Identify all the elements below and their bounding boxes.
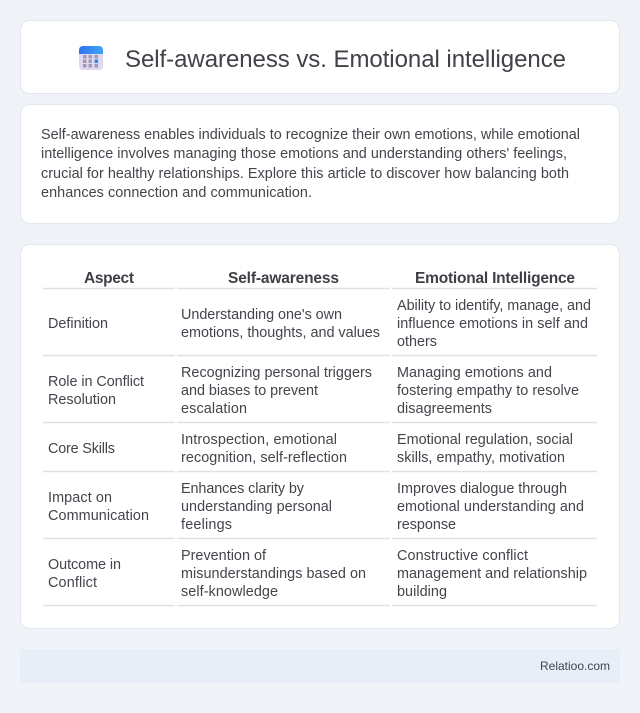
row: core skills: skills, empathy, motivation <box>397 450 565 466</box>
row: core skills: recognition, self-reflection <box>181 450 347 466</box>
row: core skills <box>43 432 597 472</box>
row: role in conflict resolution: fostering empathy to resolve <box>397 383 579 399</box>
row: core skills: Introspection, emotional <box>181 432 337 448</box>
row: outcome in conflict: building <box>397 584 447 600</box>
row: outcome in conflict: self-knowledge <box>181 584 278 600</box>
table header <box>43 270 597 288</box>
row: outcome in conflict: Conflict <box>48 575 97 591</box>
row: role in conflict resolution: Managing emotions and <box>397 365 552 381</box>
row: definition: Understanding one's own <box>181 307 342 323</box>
row: outcome in conflict <box>43 548 597 606</box>
row: core skills: Emotional regulation, social <box>397 432 573 448</box>
title: Self-awareness vs. Emotional intelligence <box>125 46 566 73</box>
panel: comparison table <box>20 244 620 628</box>
text block: introduction: crucial for healthy relationships. Explore this article to discover how balancing both <box>41 166 569 182</box>
row: impact on communication: response <box>397 517 456 533</box>
row: role in conflict resolution: Recognizing personal triggers <box>181 365 372 381</box>
text block: introduction: intelligence involves managing those emotions and understanding others' feelings, <box>41 146 567 162</box>
row: role in conflict resolution: and biases to prevent <box>181 383 318 399</box>
row: impact on communication: Communication <box>48 508 149 524</box>
row: outcome in conflict: management and relationship <box>397 566 587 582</box>
row: outcome in conflict: Constructive conflict <box>397 548 528 564</box>
row: outcome in conflict: Prevention of <box>181 548 267 564</box>
table header: Self-awareness <box>228 270 339 287</box>
row: definition: influence emotions in self and <box>397 316 588 332</box>
row: impact on communication: emotional understanding and <box>397 499 584 515</box>
row: outcome in conflict: Outcome in <box>48 557 121 573</box>
footer <box>20 649 620 683</box>
panel: introduction <box>20 104 620 224</box>
row: definition: Definition <box>48 316 108 332</box>
row: impact on communication: Improves dialogue through <box>397 481 567 497</box>
row: role in conflict resolution <box>43 365 597 422</box>
row: definition: Ability to identify, manage, and <box>397 298 591 314</box>
panel: header <box>20 20 620 94</box>
row: core skills: Core Skills <box>48 441 115 457</box>
text block: introduction: enhances connection and communication. <box>41 185 312 201</box>
row: impact on communication: understanding personal <box>181 499 332 515</box>
footer text: Relatioo.com <box>540 659 610 673</box>
row: impact on communication: Enhances clarity by <box>181 481 305 497</box>
table header: Aspect <box>84 270 134 287</box>
table header: Emotional Intelligence <box>415 270 575 287</box>
row: role in conflict resolution: escalation <box>181 401 247 417</box>
row: impact on communication: feelings <box>181 517 232 533</box>
row: outcome in conflict: misunderstandings based on <box>181 566 366 582</box>
row: role in conflict resolution: disagreements <box>397 401 492 417</box>
icon: calendar <box>79 46 103 70</box>
row: definition: emotions, thoughts, and values <box>181 325 380 341</box>
row: impact on communication <box>43 481 597 538</box>
row: role in conflict resolution: Role in Conflict <box>48 374 144 390</box>
row: definition <box>43 298 597 356</box>
row: role in conflict resolution: Resolution <box>48 392 116 408</box>
row: impact on communication: Impact on <box>48 490 112 506</box>
row: definition: others <box>397 334 437 350</box>
text block: introduction <box>41 127 580 201</box>
text block: introduction: Self-awareness enables individuals to recognize their own emotions, while emotional <box>41 127 580 143</box>
